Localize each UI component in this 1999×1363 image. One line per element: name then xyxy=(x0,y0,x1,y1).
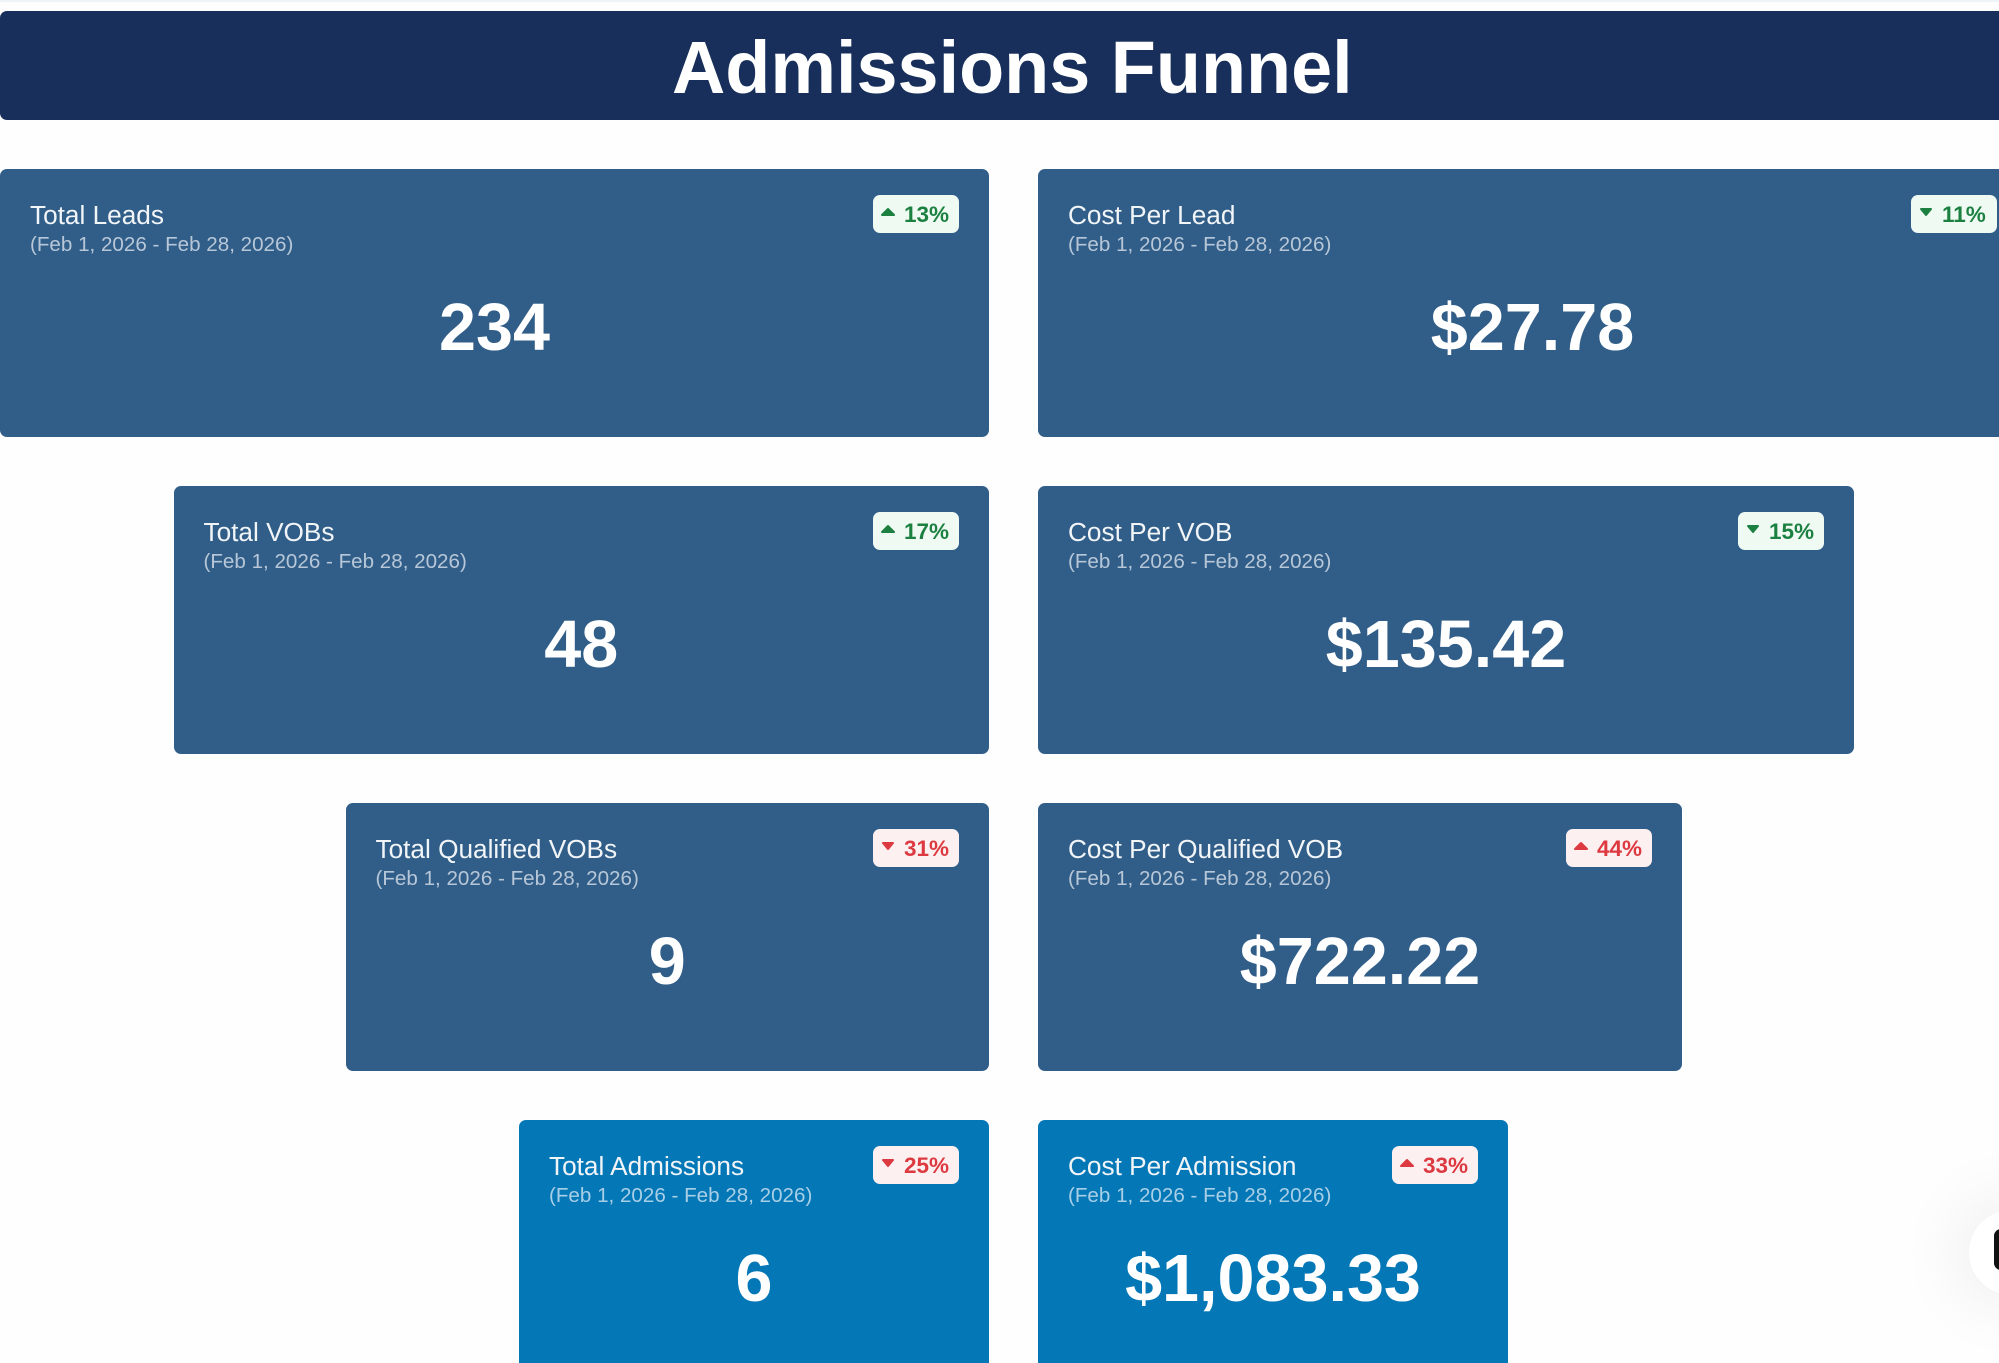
value: $1,083.33 xyxy=(1125,1242,1421,1316)
change badge: down 11%: 11% xyxy=(1942,202,1986,226)
date range: (Feb 1, 2026 - Feb 28, 2026) xyxy=(1068,550,1331,573)
value: 48 xyxy=(544,608,618,682)
value: 6 xyxy=(736,1242,772,1316)
heading: Total VOBs: Total VOBs xyxy=(204,516,334,546)
date range: (Feb 1, 2026 - Feb 28, 2026) xyxy=(30,233,293,256)
change badge: down 11% xyxy=(1911,195,1997,233)
panel: Total Qualified VOBs xyxy=(346,803,989,1071)
panel: Cost Per VOB xyxy=(1038,486,1854,754)
date range: (Feb 1, 2026 - Feb 28, 2026) xyxy=(204,550,467,573)
heading: Total Leads: Total Leads xyxy=(30,200,164,230)
heading: Cost Per Lead: Cost Per Lead xyxy=(1068,200,1235,230)
date range: (Feb 1, 2026 - Feb 28, 2026) xyxy=(1068,1184,1331,1207)
panel: Total VOBs xyxy=(174,486,989,754)
heading: Total Admissions: Total Admissions xyxy=(549,1150,744,1180)
header banner xyxy=(0,11,1999,120)
title: Admissions Funnel xyxy=(672,26,1353,109)
value: $135.42 xyxy=(1326,608,1566,682)
change badge: up 33%: 33% xyxy=(1423,1152,1468,1178)
change badge: up 13%: 13% xyxy=(904,202,949,226)
panel: Cost Per Qualified VOB xyxy=(1038,803,1682,1071)
panel: Cost Per Lead xyxy=(1038,169,1999,437)
change badge: down 15% xyxy=(1738,512,1824,550)
change badge: up 44% xyxy=(1566,829,1652,867)
heading: Cost Per VOB: Cost Per VOB xyxy=(1068,516,1232,546)
date range: (Feb 1, 2026 - Feb 28, 2026) xyxy=(1068,867,1331,890)
change badge: up 17%: 17% xyxy=(904,518,949,544)
panel: Total Leads xyxy=(0,169,989,437)
date range: (Feb 1, 2026 - Feb 28, 2026) xyxy=(376,867,639,890)
change badge: down 31%: 31% xyxy=(904,836,949,860)
change badge: up 17% xyxy=(873,512,959,550)
panel: Total Admissions xyxy=(519,1120,989,1363)
date range: (Feb 1, 2026 - Feb 28, 2026) xyxy=(549,1184,812,1207)
heading: Cost Per Qualified VOB: Cost Per Qualified VOB xyxy=(1068,834,1343,864)
heading: Cost Per Admission: Cost Per Admission xyxy=(1068,1150,1297,1180)
change badge: down 31% xyxy=(873,829,959,867)
heading: Total Qualified VOBs: Total Qualified VOBs xyxy=(376,834,617,864)
change badge: down 25%: 25% xyxy=(904,1152,949,1178)
date range: (Feb 1, 2026 - Feb 28, 2026) xyxy=(1068,233,1331,256)
panel: Cost Per Admission xyxy=(1038,1120,1508,1363)
value: 234 xyxy=(439,291,550,365)
value: 9 xyxy=(649,925,686,999)
change badge: up 44%: 44% xyxy=(1597,836,1642,860)
value: $27.78 xyxy=(1431,291,1634,365)
change badge: down 15%: 15% xyxy=(1769,518,1814,544)
value: $722.22 xyxy=(1240,925,1480,999)
change badge: down 25% xyxy=(873,1146,959,1184)
change badge: up 13% xyxy=(873,195,959,233)
change badge: up 33% xyxy=(1392,1146,1478,1184)
icon: floating chat widget xyxy=(1969,1210,1999,1295)
